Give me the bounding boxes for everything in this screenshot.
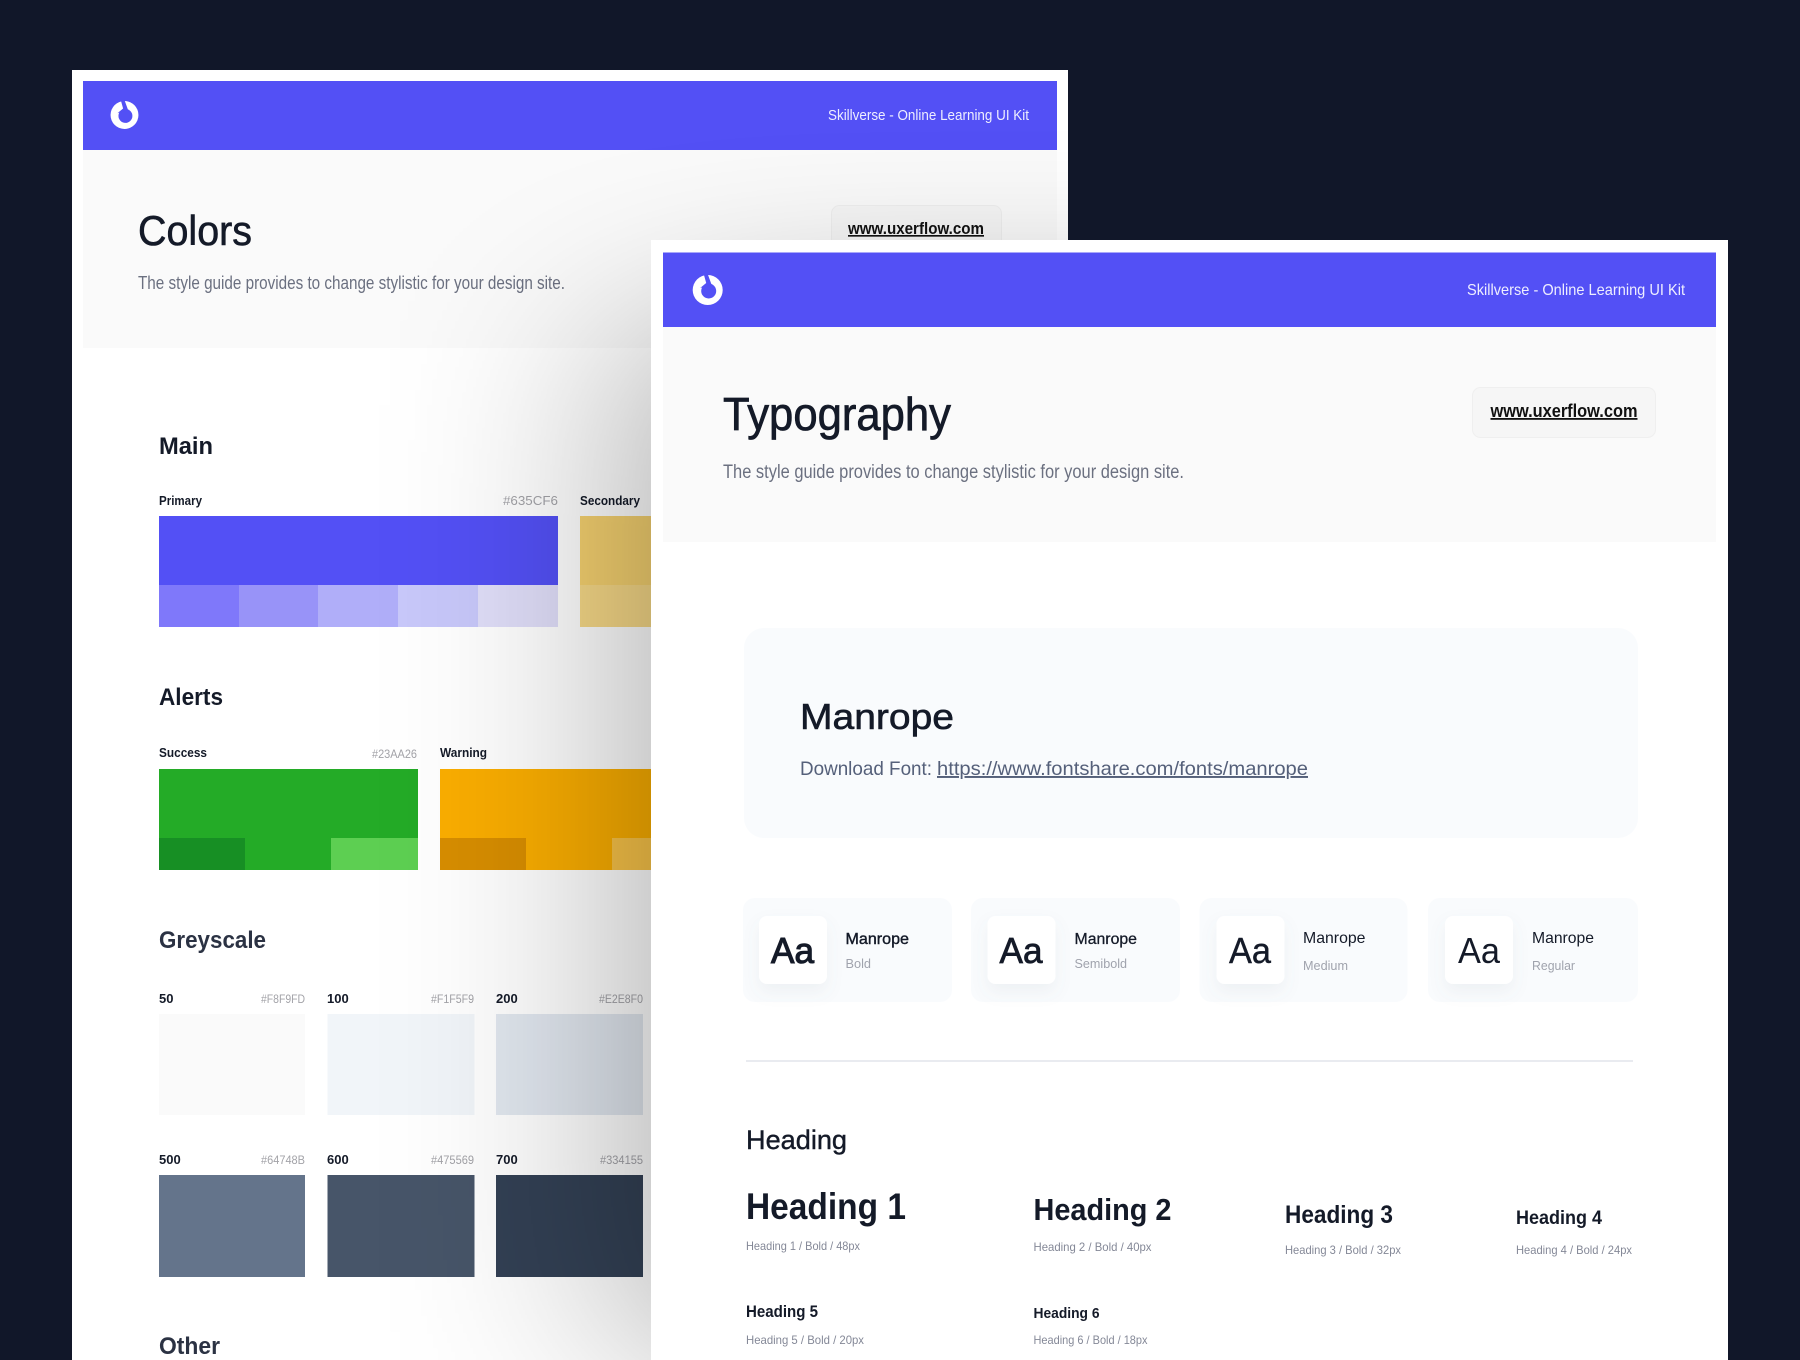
sample: heading 6 <box>1034 1305 1148 1347</box>
header bar: colors page <box>83 81 1057 150</box>
swatch: primary: Primary <box>159 494 202 508</box>
font weight card: semibold <box>971 898 1180 1002</box>
sample: heading 5: Heading 5 <box>746 1303 818 1321</box>
swatch: secondary <box>580 496 651 627</box>
sample: heading 2: Heading 2 / Bold / 40px <box>1034 1240 1152 1254</box>
swatch: 600 <box>327 1152 474 1277</box>
title: Colors: Colors <box>138 207 252 254</box>
swatch: 100 <box>327 991 474 1115</box>
Aa sample <box>1445 916 1513 984</box>
weight label <box>846 931 909 971</box>
url button: www.uxerflow.com <box>847 220 984 238</box>
swatch: success: Success <box>159 746 207 760</box>
header text: Skillverse - Online Learning UI Kit <box>828 108 1029 124</box>
weight label <box>1074 931 1137 971</box>
page header band: typography <box>663 327 1716 542</box>
swatch: 100: 100 <box>327 991 349 1006</box>
swatch: 500: #64748B <box>261 1153 305 1167</box>
subtitle: The style guide provides to change stylistic for your design site. <box>723 461 1184 483</box>
header bar: typography page <box>663 252 1716 327</box>
panel: colors page <box>72 70 1068 1360</box>
weight label: Manrope <box>1303 930 1366 947</box>
sample: heading 1: Heading 1 / Bold / 48px <box>746 1239 860 1253</box>
sample: heading 2 <box>1034 1192 1172 1254</box>
title: Typography: Typography <box>723 388 951 440</box>
swatch: warning: Warning <box>440 746 487 760</box>
weight label: Manrope <box>1532 930 1594 947</box>
sample: heading 3: Heading 3 / Bold / 32px <box>1285 1243 1401 1257</box>
section title: Heading <box>746 1125 847 1155</box>
icon: logo <box>111 100 138 129</box>
Aa sample <box>1216 916 1284 984</box>
weight label: Semibold <box>1074 956 1127 971</box>
url button <box>1472 388 1656 438</box>
Aa sample: Aa <box>1229 930 1272 971</box>
heading: Alerts: Alerts <box>159 684 223 711</box>
heading: Other: Other <box>159 1333 220 1360</box>
swatch: primary: #635CF6 <box>503 493 558 508</box>
sample: heading 4: Heading 4 / Bold / 24px <box>1516 1243 1632 1257</box>
front page drop shadow <box>484 205 1068 1360</box>
swatch: 600: #475569 <box>431 1153 474 1167</box>
weight label: Manrope <box>1074 931 1137 948</box>
swatch: 200: #E2E8F0 <box>599 992 643 1006</box>
weight label: Bold <box>846 956 871 971</box>
swatch: success: #23AA26 <box>372 747 417 761</box>
panel: Manrope font download <box>744 628 1638 838</box>
sample: heading 5 <box>746 1303 864 1347</box>
swatch: 700: #334155 <box>600 1153 643 1167</box>
swatch: 700: 700 <box>496 1152 518 1167</box>
url button <box>831 205 1002 240</box>
swatch: warning <box>440 748 651 870</box>
font weight card: bold <box>743 898 952 1002</box>
heading: Greyscale: Greyscale <box>159 927 266 954</box>
swatch: secondary: Secondary <box>580 494 640 508</box>
sample: heading 1 <box>746 1186 906 1253</box>
sample: heading 6: Heading 6 <box>1034 1305 1100 1322</box>
swatch: primary <box>159 493 558 627</box>
swatch: 100: #F1F5F9 <box>431 992 474 1006</box>
swatch: success <box>159 746 418 870</box>
subtitle: The style guide provides to change stylistic for your design site. <box>138 273 565 293</box>
swatch: 50: 50 <box>159 991 173 1006</box>
download link: Download Font: <box>800 758 932 780</box>
swatch: 700 <box>496 1152 643 1277</box>
sample: heading 5: Heading 5 / Bold / 20px <box>746 1333 864 1347</box>
swatch: 50: #F8F9FD <box>261 992 305 1006</box>
Aa sample: Aa <box>1458 930 1501 971</box>
sample: heading 6: Heading 6 / Bold / 18px <box>1034 1333 1148 1347</box>
font weight card: medium <box>1200 898 1408 1002</box>
url button: www.uxerflow.com <box>1490 401 1638 421</box>
Aa sample <box>759 916 827 984</box>
weight label <box>1532 930 1594 973</box>
sample: heading 2: Heading 2 <box>1034 1192 1172 1227</box>
sample: heading 1: Heading 1 <box>746 1186 906 1227</box>
sample: heading 4 <box>1516 1207 1632 1257</box>
swatch: 500 <box>159 1152 305 1277</box>
header text: Skillverse - Online Learning UI Kit <box>1467 282 1685 299</box>
sample: heading 3: Heading 3 <box>1285 1201 1393 1229</box>
page header band: colors <box>138 205 1002 293</box>
panel: typography page <box>651 240 1728 1360</box>
section: Main <box>159 436 651 627</box>
swatch: 600: 600 <box>327 1152 349 1167</box>
section: Alerts <box>159 688 651 870</box>
sample: heading 3 <box>1285 1201 1401 1257</box>
section: Greyscale <box>159 927 643 1277</box>
weight label: Medium <box>1303 958 1348 973</box>
Aa sample: Aa <box>771 930 815 971</box>
download link: https://www.fontshare.com/fonts/manrope <box>937 758 1308 780</box>
font name: Manrope <box>800 696 954 737</box>
heading: Main: Main <box>159 433 213 460</box>
swatch: 200 <box>496 991 643 1115</box>
section: heading samples <box>746 1125 1632 1347</box>
sample: heading 4: Heading 4 <box>1516 1207 1602 1229</box>
font weight card: regular <box>1428 898 1638 1002</box>
weight label: Regular <box>1532 958 1576 973</box>
swatch: 50 <box>159 994 304 1003</box>
weight label <box>1303 930 1366 973</box>
Aa sample: Aa <box>1000 930 1043 971</box>
swatch: 200: 200 <box>496 991 518 1006</box>
weight label: Manrope <box>846 931 909 948</box>
swatch: 500: 500 <box>159 1152 181 1167</box>
icon: logo <box>693 274 723 305</box>
Aa sample <box>988 916 1056 984</box>
